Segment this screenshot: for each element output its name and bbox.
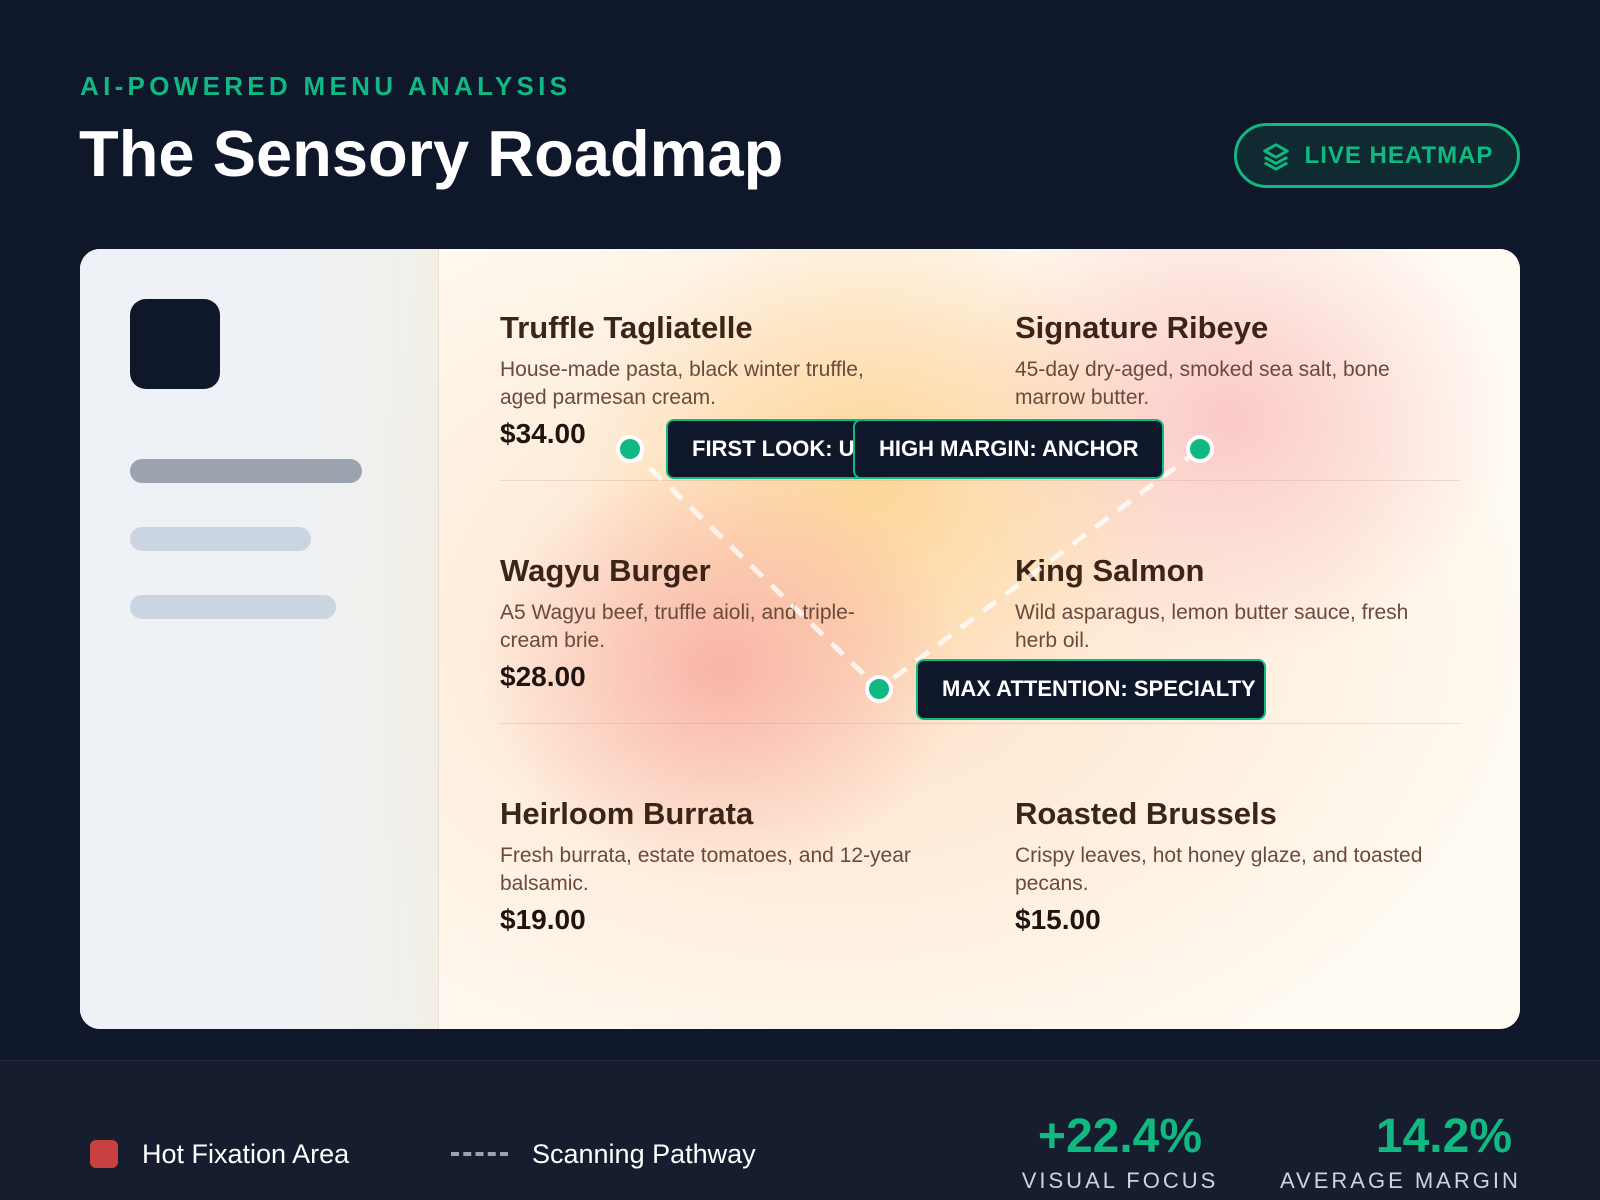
item: brussels: Crispy leaves, hot honey glaze, and toasted pecans. <box>1015 844 1422 895</box>
button: live heatmap: LIVE HEATMAP <box>1305 142 1493 168</box>
dot 3 <box>865 675 893 703</box>
nav bar 1 <box>130 459 362 483</box>
item: salmon: Wild asparagus, lemon butter sauce, fresh herb oil. <box>1015 601 1408 652</box>
item: truffle: House-made pasta, black winter truffle, aged parmesan cream. <box>500 358 864 409</box>
panel: menu card <box>80 249 1520 1029</box>
tag: max attention: MAX ATTENTION: SPECIALTY <box>942 676 1256 701</box>
item: wagyu: A5 Wagyu beef, truffle aioli, and triple-cream brie. <box>500 601 855 652</box>
item: brussels <box>1015 796 1422 935</box>
item: ribeye: Signature Ribeye <box>1015 310 1268 345</box>
item: brussels: $15.00 <box>1015 904 1101 935</box>
stat: average margin: AVERAGE MARGIN <box>1280 1168 1521 1193</box>
stat: visual focus: +22.4% <box>1038 1110 1202 1163</box>
dot 2 <box>1186 435 1214 463</box>
item: truffle: $34.00 <box>500 418 586 449</box>
stat: visual focus <box>1022 1110 1218 1193</box>
stat: average margin <box>1280 1110 1521 1193</box>
footer band <box>0 1060 1600 1200</box>
tag: high margin <box>853 419 1164 479</box>
nav bar 2 <box>130 527 311 551</box>
nav bar 3 <box>130 595 336 619</box>
tag: first look: FIRST LOOK: U <box>692 436 855 461</box>
item: truffle <box>500 310 864 449</box>
tag: first look <box>666 419 876 479</box>
legend: scanning pathway: Scanning Pathway <box>532 1138 756 1168</box>
heatmap <box>80 249 1520 1029</box>
legend: hot fixation: Hot Fixation Area <box>142 1138 349 1168</box>
item: wagyu: Wagyu Burger <box>500 553 711 588</box>
item: brussels: Roasted Brussels <box>1015 796 1277 831</box>
item: ribeye: 45-day dry-aged, smoked sea salt, bone marrow butter. <box>1015 358 1390 409</box>
title: The Sensory Roadmap <box>79 117 783 190</box>
item: salmon <box>1015 553 1408 652</box>
item: burrata: Fresh burrata, estate tomatoes, and 12-year balsamic. <box>500 844 911 895</box>
sidebar <box>80 249 439 1029</box>
eyebrow: AI-POWERED MENU ANALYSIS <box>80 71 571 101</box>
item: ribeye <box>1015 310 1390 409</box>
icon: layers <box>1263 143 1289 171</box>
item: wagyu <box>500 553 855 692</box>
item: burrata: $19.00 <box>500 904 586 935</box>
stat: visual focus: VISUAL FOCUS <box>1022 1168 1218 1193</box>
button: live heatmap <box>1234 123 1520 188</box>
logo placeholder <box>130 299 220 389</box>
scanning pathway <box>638 456 1190 680</box>
item: wagyu: $28.00 <box>500 661 586 692</box>
dot 1 <box>616 435 644 463</box>
item: burrata: Heirloom Burrata <box>500 796 753 831</box>
item: salmon: King Salmon <box>1015 553 1204 588</box>
tag: high margin: HIGH MARGIN: ANCHOR <box>879 436 1138 461</box>
tag: max attention <box>916 659 1266 720</box>
stat: average margin: 14.2% <box>1376 1110 1512 1163</box>
item: truffle: Truffle Tagliatelle <box>500 310 753 345</box>
item: burrata <box>500 796 911 935</box>
